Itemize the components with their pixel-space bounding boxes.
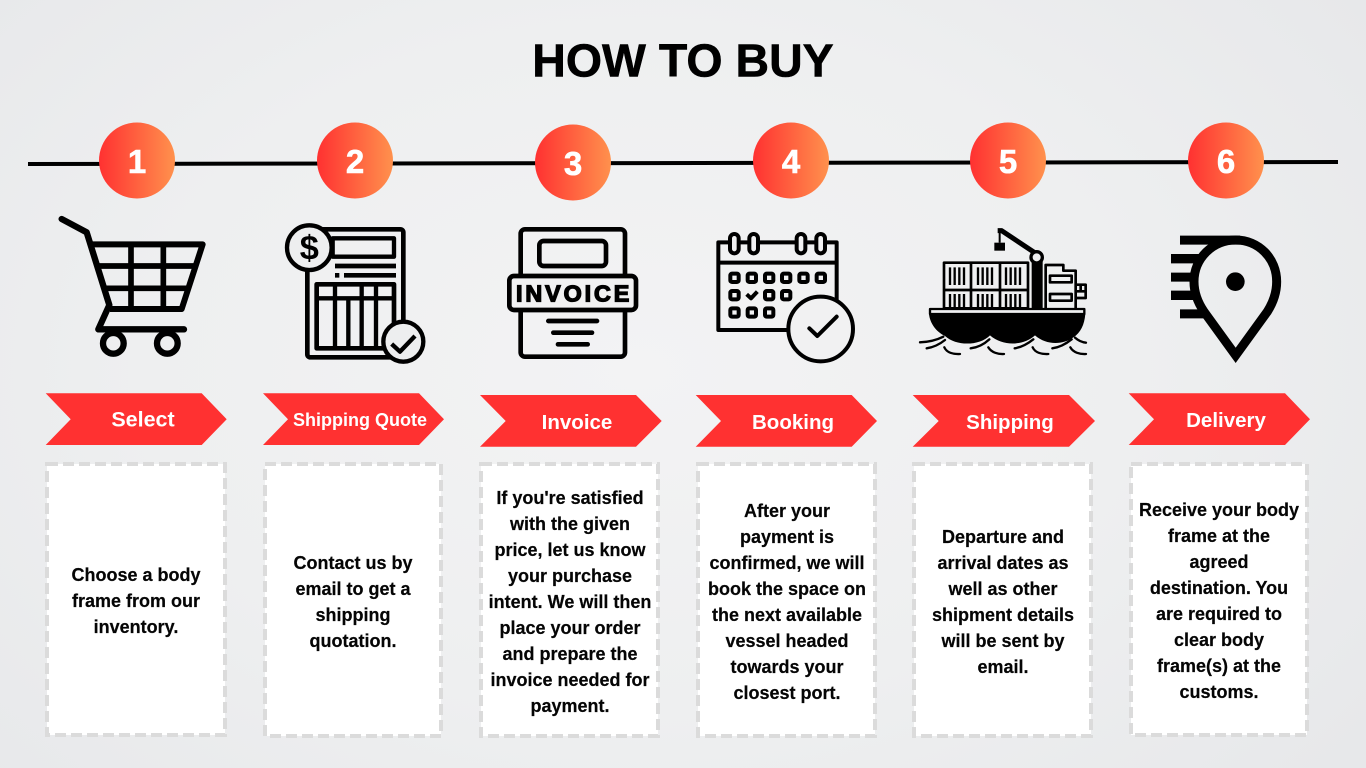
card: booking: book the space on — [708, 579, 866, 599]
icon: delivery location pin — [1171, 236, 1277, 355]
step number 4: 4 — [782, 143, 801, 180]
card: delivery: customs. — [1179, 682, 1259, 702]
icon: container ship — [920, 231, 1086, 354]
icon: shipping quote document — [287, 225, 423, 362]
arrow label: Invoice — [480, 395, 662, 447]
arrow label: Shipping Quote: Shipping Quote — [293, 410, 427, 430]
step number 3: 3 — [564, 145, 582, 182]
step number 5 — [970, 122, 1046, 198]
icon: shopping cart — [62, 219, 203, 354]
card: invoice: If you're satisfied — [496, 488, 644, 508]
step number 3 — [535, 124, 611, 200]
arrow label: Delivery — [1129, 393, 1310, 445]
card: shipping: will be sent by — [940, 631, 1065, 651]
card: delivery: frame at the — [1168, 526, 1270, 546]
card: select: inventory. — [94, 617, 178, 637]
card: invoice — [481, 464, 658, 736]
arrow label: Shipping Quote — [263, 393, 444, 445]
card: invoice: intent. We will then — [489, 592, 651, 612]
arrow label: Shipping — [913, 395, 1095, 447]
icon: invoice document: INVOICE — [516, 281, 629, 307]
icon: invoice document — [509, 229, 636, 357]
card: booking: closest port. — [733, 683, 841, 703]
card: booking: confirmed, we will — [709, 553, 865, 573]
arrow label: Invoice: Invoice — [542, 411, 612, 434]
icon: booking calendar — [718, 234, 853, 361]
card: booking: After your — [744, 501, 830, 521]
card: shipping — [914, 464, 1091, 736]
icon: shipping quote document: $ — [300, 230, 319, 268]
card: shipping quote: Contact us by — [293, 553, 413, 573]
card: shipping: arrival dates as — [937, 553, 1069, 573]
timeline line — [28, 162, 1338, 164]
card: shipping quote: email to get a — [295, 579, 412, 599]
card: shipping: email. — [977, 657, 1029, 677]
card: booking: vessel headed — [725, 631, 849, 651]
step number 2 — [317, 122, 393, 198]
card: invoice: place your order — [499, 618, 641, 638]
card: delivery: agreed — [1189, 552, 1249, 572]
arrow label: Booking: Booking — [752, 411, 834, 434]
card: delivery — [1131, 464, 1307, 735]
card: delivery: frame(s) at the — [1157, 656, 1281, 676]
card: invoice: payment. — [530, 696, 610, 716]
arrow label: Select — [46, 393, 227, 445]
arrow label: Delivery: Delivery — [1186, 409, 1266, 432]
step number 1: 1 — [128, 143, 146, 180]
card: booking: the next available — [712, 605, 862, 625]
card: shipping: well as other — [947, 579, 1058, 599]
card: shipping quote: quotation. — [310, 631, 396, 651]
card: shipping quote: shipping — [316, 605, 390, 625]
card: delivery: clear body — [1174, 630, 1264, 650]
arrow label: Booking — [696, 395, 877, 447]
step number 5: 5 — [999, 143, 1017, 180]
card: delivery: are required to — [1156, 604, 1282, 624]
card: shipping quote — [265, 464, 441, 736]
card: select: frame from our — [72, 591, 200, 611]
card: select: Choose a body — [71, 565, 201, 585]
card: shipping: Departure and — [942, 527, 1064, 547]
arrow label: Select: Select — [111, 408, 175, 432]
step number 4 — [753, 122, 829, 198]
card: invoice: invoice needed for — [490, 670, 650, 690]
card: select — [47, 464, 225, 735]
card: booking: payment is — [740, 527, 834, 547]
card: invoice: with the given — [509, 514, 630, 534]
step number 6 — [1188, 122, 1264, 198]
title: HOW TO BUY — [532, 34, 834, 86]
card: invoice: price, let us know — [494, 540, 647, 560]
card: booking — [698, 464, 875, 736]
step number 6: 6 — [1217, 143, 1235, 180]
card: invoice: your purchase — [508, 566, 632, 586]
step number 1 — [99, 122, 175, 198]
card: shipping: shipment details — [932, 605, 1074, 625]
step number 2: 2 — [346, 143, 364, 180]
card: booking: towards your — [730, 657, 844, 677]
arrow label: Shipping: Shipping — [966, 411, 1054, 434]
card: delivery: Receive your body — [1139, 500, 1299, 520]
card: invoice: and prepare the — [502, 644, 638, 664]
card: delivery: destination. You — [1150, 578, 1288, 598]
